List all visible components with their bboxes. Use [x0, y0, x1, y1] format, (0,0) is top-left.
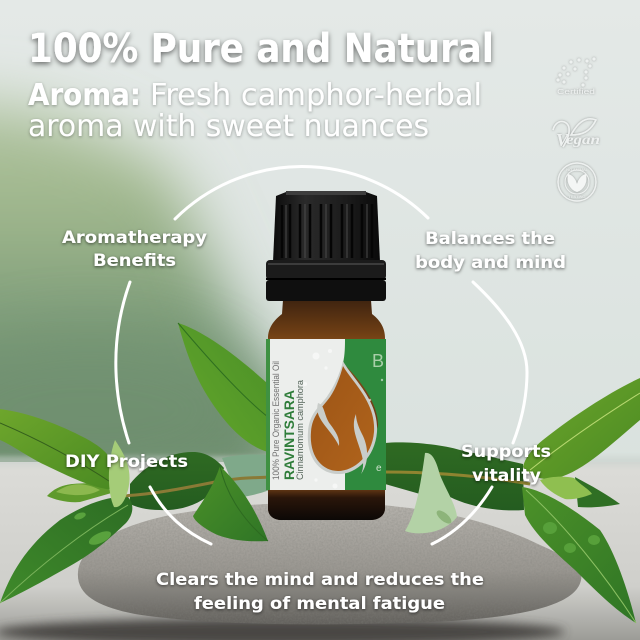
label	[266, 339, 346, 490]
label text: RAVINTSARA	[281, 390, 297, 480]
right far dark leaf	[575, 477, 620, 507]
small back leaf left	[47, 483, 115, 502]
label green panel	[343, 339, 386, 490]
label text: B	[372, 351, 384, 371]
label: clears the mind: feeling of mental fatigue	[194, 594, 445, 614]
subtitle: aroma description: Aroma:	[28, 78, 141, 113]
label text: e	[376, 463, 382, 474]
subtitle: aroma description: Fresh camphor-herbal	[150, 78, 482, 113]
label: aromatherapy benefits	[62, 228, 207, 271]
label green edge	[266, 339, 270, 490]
small light leaf left	[56, 484, 100, 495]
drop flames	[317, 403, 367, 474]
label: clears the mind: Clears the mind and reduces the	[156, 570, 484, 590]
label: balances the body and mind: body and mind	[415, 253, 566, 273]
subtitle: aroma description: aroma with sweet nuances	[28, 109, 429, 144]
drop	[311, 366, 374, 471]
icon: EU organic leaf: Certified	[557, 89, 595, 96]
bottle glass	[268, 300, 385, 520]
icon: cruelty free badge: TESTING	[568, 194, 586, 199]
water droplets	[303, 349, 383, 488]
label: balances the body and mind: Balances the	[425, 229, 555, 249]
translucent bud	[109, 440, 130, 507]
icon: vegan: egan	[566, 133, 600, 148]
label text	[271, 351, 384, 480]
pale background leaf	[222, 454, 270, 497]
cap collar	[266, 260, 386, 301]
right middle dark leaf	[385, 442, 524, 510]
right top leaf	[523, 378, 640, 479]
right stem	[385, 472, 530, 484]
label: supports vitality: vitality	[472, 466, 541, 486]
subtitle: aroma description	[28, 78, 482, 144]
icon: vegan	[553, 119, 600, 150]
label: aromatherapy benefits: Benefits	[93, 251, 176, 271]
label text: 100% Pure Organic Essential Oil	[271, 361, 282, 480]
icon: cruelty free badge: NO ANIMAL	[566, 167, 589, 172]
label: supports vitality	[461, 442, 551, 486]
label text: Cinnamomum camphora	[295, 379, 306, 480]
icon: cruelty free badge	[558, 163, 596, 201]
bottle	[266, 191, 386, 520]
left dark middle leaf	[130, 452, 224, 510]
label: clears the mind	[156, 570, 484, 614]
stem	[120, 477, 270, 496]
table surface	[0, 456, 640, 640]
bottle dark base	[268, 488, 385, 520]
black cap	[273, 191, 380, 262]
label: supports vitality: Supports	[461, 442, 551, 462]
label: DIY projects: DIY Projects	[65, 452, 188, 472]
icon: vegan: V	[556, 130, 570, 150]
right lower leaf	[522, 487, 636, 623]
icon: EU organic leaf	[556, 57, 596, 96]
triangular leaf	[193, 466, 268, 541]
circular ring arcs	[116, 167, 527, 544]
label: aromatherapy benefits: Aromatherapy	[62, 228, 207, 248]
label: balances the body and mind	[415, 229, 566, 273]
stone	[78, 502, 581, 624]
small light leaf right	[540, 477, 592, 499]
pale translucent leaf	[405, 453, 457, 533]
drop outline	[308, 361, 377, 474]
certification icons	[553, 57, 600, 201]
stone shadow	[0, 618, 565, 640]
upper left leaf behind bottle	[178, 323, 268, 452]
title: 100% Pure and Natural	[28, 26, 494, 72]
upper left leaf	[0, 409, 112, 490]
lower left leaf	[0, 497, 132, 603]
